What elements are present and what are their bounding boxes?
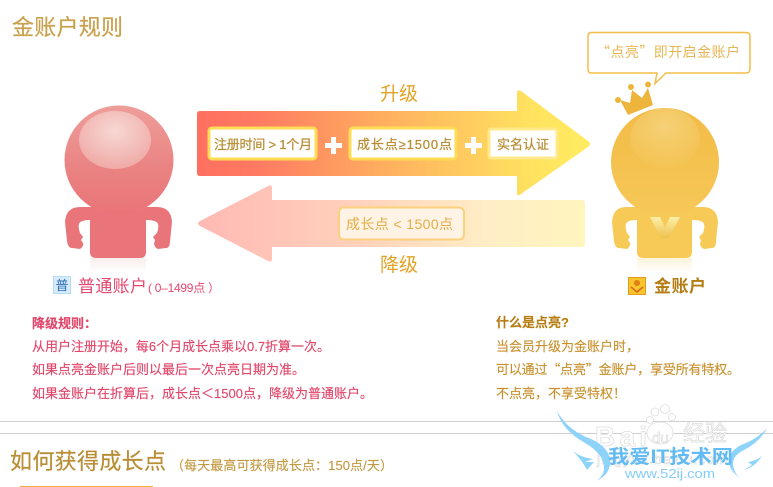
condition: growth points: 成长点≥1500点 — [357, 137, 452, 152]
label: gold account — [628, 276, 706, 296]
text block: what is light up — [496, 315, 740, 401]
text block: downgrade rules — [32, 316, 373, 401]
text block: downgrade rules: 从用户注册开始，每6个月成长点乘以0.7折算一次。 — [32, 339, 330, 354]
arrow: downgrade — [198, 185, 585, 276]
arrow: upgrade — [197, 83, 590, 195]
tab underline — [20, 486, 153, 487]
character: regular account — [64, 106, 174, 273]
text block: what is light up: 当会员升级为金账户时， — [496, 339, 639, 354]
label: regular account: 普通账户 — [78, 277, 147, 296]
text block: downgrade rules: 降级规则： — [32, 316, 97, 331]
icon: V mark — [650, 217, 680, 238]
icon: crown — [615, 82, 653, 115]
watermark: baidu jingyan: du — [652, 430, 669, 447]
label: downgrade: 降级 — [380, 254, 418, 276]
label: regular account — [54, 276, 220, 296]
label: upgrade: 升级 — [380, 83, 418, 105]
watermark: baidu jingyan: jingyan.baidu.com — [596, 451, 727, 467]
heading: how to get growth points — [10, 449, 393, 474]
label: regular account: ( 0–1499点 ） — [148, 281, 220, 295]
watermark: baidu jingyan: Bai — [595, 421, 647, 452]
condition: registration time — [209, 128, 316, 159]
icon: gold badge — [628, 278, 646, 294]
icon: regular badge: 普 — [55, 278, 69, 293]
condition: points below 1500 — [339, 208, 464, 240]
watermark: blue wings and site name — [557, 411, 767, 481]
character: gold account — [611, 108, 719, 273]
icon: plus two — [465, 137, 482, 154]
text block: what is light up: 可以通过“点亮”金账户，享受所有特权。 — [496, 359, 740, 378]
watermark: blue wings and site name: www.52ij.com — [624, 466, 715, 481]
watermark: baidu jingyan — [595, 404, 727, 467]
icon: plus one — [325, 137, 342, 154]
speech bubble: light up to activate: “点亮”即开启金账户 — [596, 42, 740, 62]
condition: points below 1500: 成长点 < 1500点 — [346, 216, 453, 232]
watermark: blue wings and site name: 我爱IT技术网 — [608, 446, 733, 468]
condition: real-name verification: 实名认证 — [497, 137, 549, 152]
condition: growth points — [350, 128, 456, 159]
heading: how to get growth points: （每天最高可获得成长点：150点/天） — [171, 458, 393, 473]
condition: registration time: 注册时间 > 1个月 — [214, 137, 312, 152]
condition: real-name verification — [489, 129, 557, 158]
speech bubble: light up to activate — [588, 32, 750, 84]
title: gold account rules: 金账户规则 — [12, 15, 123, 40]
text block: downgrade rules: 如果点亮金账户后则以最后一次点亮日期为准。 — [32, 362, 305, 377]
heading: how to get growth points: 如何获得成长点 — [10, 449, 166, 474]
text block: what is light up: 什么是点亮? — [496, 315, 569, 330]
watermark: baidu jingyan: 经验 — [683, 421, 727, 446]
icon: regular badge — [54, 276, 70, 294]
text block: what is light up: 不点亮，不享受特权！ — [496, 386, 626, 401]
text block: downgrade rules: 如果金账户在折算后，成长点＜1500点，降级为普通账户。 — [32, 386, 373, 401]
label: gold account: 金账户 — [654, 276, 706, 296]
